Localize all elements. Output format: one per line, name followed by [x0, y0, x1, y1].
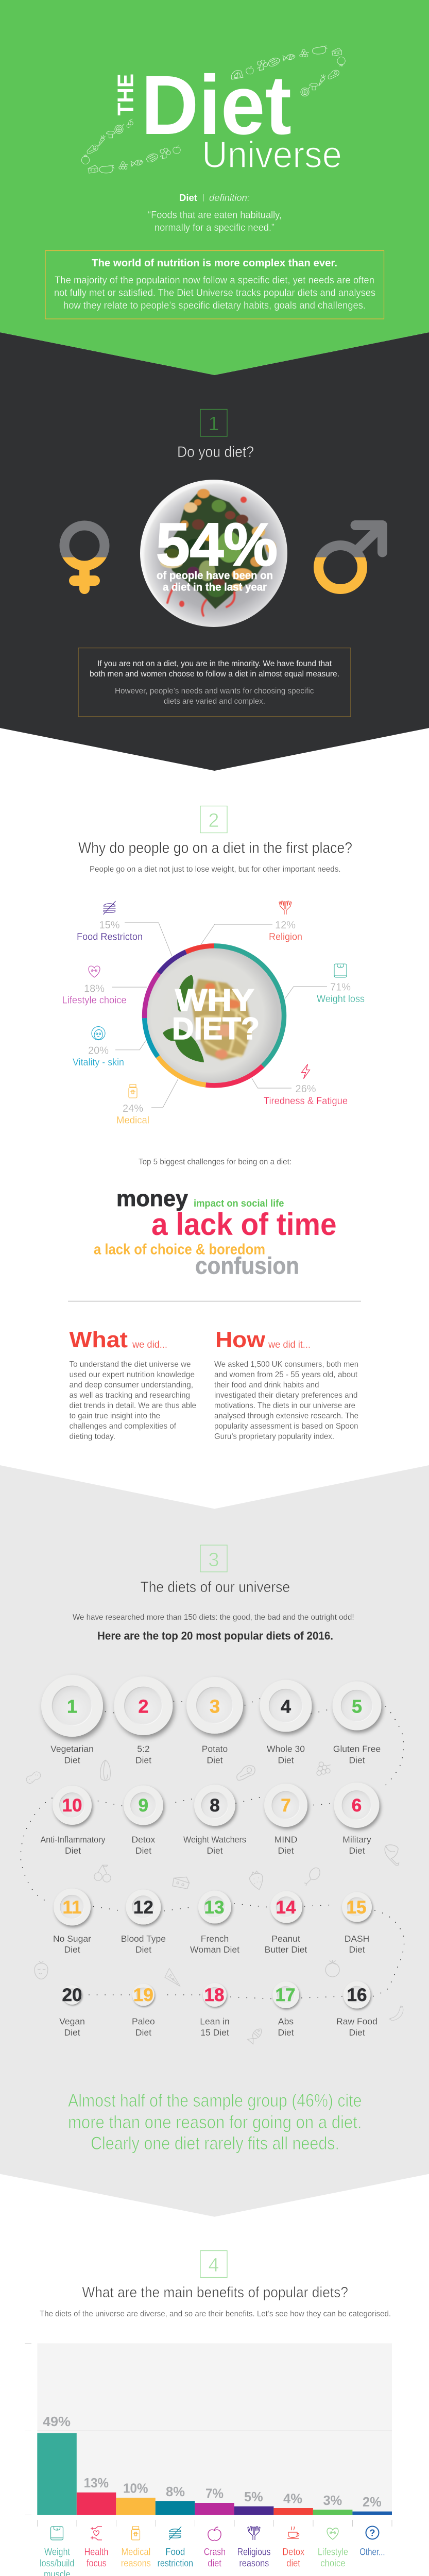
heading: why do people diet: Why do people go on a diet in the first place?	[78, 840, 352, 857]
word cloud: challenges	[94, 1186, 337, 1279]
text block: what we did: and deep consumer understanding,	[69, 1381, 193, 1389]
list item: 1 Vegetarian Diet: Diet	[64, 1755, 80, 1765]
callout: weight loss 71%: 71%	[330, 981, 351, 993]
list item: 3 Potato Diet: Potato	[202, 1743, 228, 1754]
list item: 16 Raw Food Diet	[336, 1981, 377, 2038]
word cloud: challenges: money	[116, 1186, 188, 1211]
text block: how we did it: analysed through extensive research. The	[214, 1412, 358, 1420]
list item: 5 Gluten Free Diet	[333, 1682, 381, 1765]
bar values: 8%	[166, 2484, 185, 2499]
text: top 20 heading: Here are the top 20 most popular diets of 2016.	[97, 1630, 333, 1642]
text block: how we did it: investigated their dietary preferences and	[214, 1391, 357, 1400]
text: researched intro: We have researched more than 150 diets: the good, the bad and the outright odd!	[73, 1613, 354, 1622]
list item: 9 Detox Diet: 9	[139, 1795, 148, 1816]
list item: 17 Abs Diet: 17	[276, 1985, 295, 2005]
callout: medical 24%: 24%	[123, 1103, 143, 1114]
category: medical reasons: reasons	[121, 2558, 151, 2569]
text block: how we did it: Guru’s proprietary popularity index.	[214, 1432, 334, 1441]
list item: 16 Raw Food Diet: Diet	[349, 2027, 365, 2038]
list item: 1 Vegetarian Diet: Vegetarian	[50, 1743, 94, 1754]
list item: 6 Military Diet	[334, 1783, 379, 1856]
list item: 11 No Sugar Diet	[53, 1889, 91, 1955]
list item: 7 MIND Diet: Diet	[278, 1845, 294, 1856]
icons: food orbit around the title	[81, 46, 345, 173]
text block: how we did it: How	[215, 1327, 266, 1352]
text: subheading: People go on a diet not just to lose weight, but for other important needs.	[90, 865, 341, 874]
list item: 17 Abs Diet: Diet	[278, 2027, 294, 2038]
word cloud: challenges: impact on social life	[194, 1198, 284, 1209]
chart: pasta plate donut	[145, 946, 284, 1086]
list item: 16 Raw Food Diet: 16	[347, 1985, 367, 2005]
section number 3: 3	[208, 1549, 219, 1571]
list item: 6 Military Diet: Diet	[349, 1845, 365, 1856]
title	[113, 58, 342, 176]
callout: food restriction 15%: Food Restricton	[77, 931, 143, 943]
image: salad plate	[140, 480, 287, 627]
list item: 17 Abs Diet	[272, 1981, 299, 2038]
list item: 1 Vegetarian Diet	[41, 1675, 103, 1765]
list item: 2 5:2 Diet: 2	[138, 1696, 148, 1717]
callout: world of nutrition: The world of nutrition is more complex than ever.	[92, 258, 337, 269]
heading: do you diet: Do you diet?	[177, 444, 254, 461]
callout: world of nutrition: The majority of the population now follow a specific diet, yet needs are often	[55, 275, 374, 286]
icons: background food outlines	[26, 1758, 403, 2044]
callout: food restriction 15%	[77, 901, 172, 956]
chart: benefits bar chart	[25, 2343, 392, 2527]
section number 4: 4	[208, 2255, 219, 2276]
list item: 5 Gluten Free Diet: Gluten Free	[333, 1743, 381, 1754]
category: detox diet: Detox	[282, 2547, 305, 2558]
text block: what we did: used our expert nutrition knowledge	[69, 1370, 195, 1379]
list item: 12 Blood Type Diet: 12	[133, 1897, 153, 1918]
list item: 3 Potato Diet: Diet	[207, 1755, 223, 1765]
list item: 12 Blood Type Diet	[121, 1890, 166, 1955]
section number 3	[200, 1545, 227, 1572]
callout: minority: However, people’s needs and wants for choosing specific	[115, 687, 314, 696]
text block: how we did it	[214, 1327, 358, 1441]
list item: 19 Paleo Diet: 19	[133, 1985, 153, 2005]
category: crash diet	[204, 2527, 226, 2569]
category: food restriction: restriction	[158, 2558, 193, 2569]
list item: 8 Weight Watchers Diet: Diet	[207, 1845, 223, 1856]
bar values: 2%	[363, 2494, 382, 2510]
text block: what we did: as well as tracking and researching	[69, 1391, 190, 1400]
list item: 9 Detox Diet	[124, 1786, 163, 1856]
list item: 15 DASH Diet: 15	[347, 1897, 366, 1918]
icon: male symbol	[318, 526, 382, 589]
category: crash diet: Crash	[204, 2547, 226, 2558]
text: definition: Diet	[179, 193, 197, 203]
list item: 18 Lean in 15 Diet: 15 Diet	[200, 2027, 229, 2038]
text block: what we did: challenges and complexities of	[69, 1422, 177, 1431]
category: food restriction: Food	[166, 2547, 185, 2558]
list item: 3 Potato Diet: 3	[210, 1696, 220, 1717]
list item: 7 MIND Diet: 7	[281, 1795, 291, 1816]
list item: 8 Weight Watchers Diet: Weight Watchers	[183, 1834, 246, 1844]
callout: almost half of sample: Clearly one diet rarely fits all needs.	[91, 2133, 339, 2154]
callout: world of nutrition: how they relate to people’s specific dietary habits, goals and challenges.	[63, 300, 366, 311]
chart: pasta plate donut: WHY	[175, 983, 254, 1018]
list item: 9 Detox Diet: Detox	[132, 1834, 156, 1844]
callout: vitality skin 20%: 20%	[88, 1045, 109, 1056]
callout: world of nutrition: not fully met or satisfied. The Diet Universe tracks popular diets and analyses	[54, 287, 375, 299]
list item: 19 Paleo Diet: Diet	[135, 2027, 151, 2038]
callout: world of nutrition	[45, 250, 384, 319]
stat: 54 percent: 54%	[156, 511, 278, 578]
stat: 54 percent: of people have been on	[157, 570, 273, 582]
category: health focus: focus	[87, 2558, 107, 2569]
text: top 5 challenges intro: Top 5 biggest challenges for being on a diet:	[139, 1158, 291, 1166]
list item: 11 No Sugar Diet: 11	[63, 1897, 81, 1918]
list item: 20 Vegan Diet: Vegan	[59, 2016, 85, 2027]
list item: 13 French Woman Diet: Woman Diet	[190, 1944, 239, 1955]
list item: 2 5:2 Diet: Diet	[135, 1755, 151, 1765]
list item: 13 French Woman Diet: French	[201, 1934, 229, 1944]
list item: 4 Whole 30 Diet	[260, 1680, 312, 1765]
text block: what we did: What	[69, 1327, 128, 1352]
category: health focus: Health	[84, 2547, 108, 2558]
list item: 10 Anti-Inflammatory Diet	[40, 1786, 106, 1856]
callout: medical 24%: Medical	[116, 1115, 149, 1126]
list item: 8 Weight Watchers Diet: 8	[210, 1795, 220, 1816]
callout: tiredness and fatigue 26%	[252, 1064, 348, 1107]
category: medical reasons: Medical	[121, 2547, 150, 2558]
list item: 4 Whole 30 Diet: Whole 30	[267, 1743, 305, 1754]
list item: 2 5:2 Diet: 5:2	[137, 1743, 150, 1754]
section number 2	[200, 806, 227, 833]
list item: 4 Whole 30 Diet: 4	[281, 1696, 291, 1717]
list item: 20 Vegan Diet	[59, 1985, 85, 2038]
bar values: 4%	[283, 2491, 302, 2506]
category: weight loss / build muscle: loss/build	[40, 2558, 74, 2569]
list item: 6 Military Diet: 6	[352, 1795, 362, 1816]
text block: what we did	[69, 1327, 196, 1441]
heading: main benefits: What are the main benefits of popular diets?	[82, 2284, 348, 2301]
list item: 10 Anti-Inflammatory Diet: 10	[62, 1795, 82, 1816]
callout: vitality skin 20%: Vitality - skin	[73, 1057, 124, 1068]
list item: 10 Anti-Inflammatory Diet: Anti-Inflammatory	[40, 1834, 106, 1844]
panel: header background	[0, 0, 429, 375]
callout: minority: both men and women choose to follow a diet in almost equal measure.	[90, 670, 339, 679]
category: detox diet	[282, 2527, 305, 2569]
category: weight loss / build muscle	[40, 2527, 74, 2576]
text block: what we did: dieting today.	[69, 1432, 115, 1441]
callout: lifestyle choice 18%: Lifestyle choice	[62, 995, 127, 1006]
list item: 18 Lean in 15 Diet: 18	[204, 1985, 224, 2005]
list item: 11 No Sugar Diet: No Sugar	[53, 1934, 91, 1944]
list item: 6 Military Diet: Military	[342, 1834, 371, 1844]
category: lifestyle choice: choice	[320, 2558, 346, 2569]
list item: 17 Abs Diet: Abs	[278, 2016, 294, 2027]
category: detox diet: diet	[286, 2558, 301, 2569]
word cloud: challenges: a lack of choice & boredom	[94, 1242, 265, 1258]
list item: 3 Potato Diet	[186, 1677, 243, 1765]
bar values: 7%	[205, 2486, 224, 2501]
list item: 18 Lean in 15 Diet	[200, 1983, 230, 2038]
section number 2: 2	[208, 810, 219, 832]
callout: tiredness and fatigue 26%: 26%	[295, 1083, 316, 1095]
text block: what we did: To understand the diet universe we	[69, 1360, 191, 1369]
callout: minority: diets are varied and complex.	[164, 697, 265, 706]
category: religious reasons: Religious	[237, 2547, 271, 2558]
bars	[37, 2433, 392, 2515]
list item: 8 Weight Watchers Diet	[183, 1785, 246, 1856]
callout: medical 24%	[116, 1079, 178, 1126]
title: THE	[113, 74, 138, 115]
list item: 5 Gluten Free Diet: 5	[352, 1696, 362, 1717]
text: definition: definition:	[209, 193, 250, 203]
list item: 7 MIND Diet	[264, 1784, 307, 1856]
text block: how we did it: motivations. The diets in our universe are	[214, 1401, 355, 1410]
callout: religion 12%: Religion	[269, 931, 302, 943]
category: health focus	[84, 2527, 108, 2569]
list item: 7 MIND Diet: MIND	[274, 1834, 297, 1844]
section number 4	[200, 2250, 227, 2277]
list item: 15 DASH Diet: Diet	[349, 1944, 365, 1955]
list item: 19 Paleo Diet: Paleo	[132, 2016, 155, 2027]
callout: vitality skin 20%	[73, 1027, 146, 1068]
list item: 14 Peanut Butter Diet: 14	[276, 1897, 296, 1918]
text: definition: normally for a specific need.”	[155, 223, 274, 233]
bar values: 5%	[244, 2489, 263, 2504]
category: food restriction	[158, 2527, 193, 2569]
heading: diets of our universe: The diets of our universe	[141, 1579, 290, 1596]
section number 1: 1	[208, 413, 219, 435]
category: crash diet: diet	[208, 2558, 222, 2569]
list item: 14 Peanut Butter Diet: Butter Diet	[265, 1944, 307, 1955]
category: lifestyle choice	[318, 2528, 348, 2569]
list item: 12 Blood Type Diet: Diet	[135, 1944, 151, 1955]
list item: 10 Anti-Inflammatory Diet: Diet	[65, 1845, 81, 1856]
list item: 16 Raw Food Diet: Raw Food	[336, 2016, 377, 2027]
list item: 11 No Sugar Diet: Diet	[64, 1944, 80, 1955]
category: medical reasons	[121, 2527, 151, 2569]
category: other: Other...	[359, 2547, 385, 2558]
callout: almost half of sample: more than one reason for going on a diet.	[68, 2112, 362, 2132]
text block: how we did it: and women from 25 - 55 years old, about	[214, 1370, 358, 1379]
list item: 9 Detox Diet: Diet	[135, 1845, 151, 1856]
text block: how we did it: popularity assessment is based on Spoon	[214, 1422, 358, 1431]
title: Diet	[141, 58, 291, 152]
bar values: 3%	[323, 2493, 342, 2508]
list item: 15 DASH Diet	[342, 1892, 372, 1955]
panel: diets section background	[0, 1465, 429, 2217]
category: religious reasons	[237, 2527, 271, 2569]
callout: lifestyle choice 18%	[62, 966, 147, 1006]
list item: 2 5:2 Diet	[114, 1676, 173, 1765]
list item: 1 Vegetarian Diet: 1	[67, 1696, 77, 1717]
list item: 14 Peanut Butter Diet: Peanut	[271, 1934, 300, 1944]
callout: religion 12%	[201, 901, 302, 944]
text: definition	[148, 193, 282, 233]
text: benefits intro: The diets of the universe are diverse, and so are their benefits. Let’s see how they can be categorised.	[40, 2310, 391, 2318]
text block: what we did: diet trends in detail. We are thus able	[69, 1401, 196, 1410]
text block: how we did it: we did it...	[268, 1340, 311, 1350]
list item: 13 French Woman Diet	[190, 1891, 239, 1955]
callout: tiredness and fatigue 26%: Tiredness & Fatigue	[264, 1096, 348, 1107]
category: lifestyle choice: Lifestyle	[318, 2547, 348, 2558]
list item: 13 French Woman Diet: 13	[204, 1897, 224, 1918]
callout: minority: If you are not on a diet, you are in the minority. We have found that	[97, 659, 332, 668]
category: other	[359, 2527, 385, 2558]
category: religious reasons: reasons	[239, 2558, 269, 2569]
text block: what we did: to gain true insight into the	[69, 1412, 160, 1420]
category: weight loss / build muscle: Weight	[44, 2547, 71, 2558]
list item: 5 Gluten Free Diet: Diet	[349, 1755, 365, 1765]
list item: 14 Peanut Butter Diet	[265, 1891, 307, 1955]
list item: 20 Vegan Diet: 20	[62, 1985, 82, 2005]
callout: minority	[78, 648, 351, 717]
panel: do you diet background	[0, 332, 429, 771]
list item: 15 DASH Diet: DASH	[345, 1934, 369, 1944]
path: dotted connector	[21, 1699, 404, 1999]
list item: 12 Blood Type Diet: Blood Type	[121, 1934, 166, 1944]
list item: 19 Paleo Diet	[132, 1984, 155, 2038]
word cloud: challenges: confusion	[195, 1252, 299, 1279]
bar values: 13%	[84, 2475, 109, 2490]
section number 1	[200, 409, 227, 436]
text: definition: “Foods that are eaten habitually,	[148, 210, 282, 221]
category: other: ?	[370, 2528, 375, 2538]
word cloud: challenges: a lack of time	[151, 1207, 337, 1242]
bar values: 10%	[123, 2481, 148, 2496]
bar values	[43, 2414, 382, 2510]
list item: 4 Whole 30 Diet: Diet	[278, 1755, 294, 1765]
callout: weight loss 71%: Weight loss	[317, 994, 365, 1005]
stat: 54 percent: a diet in the last year	[163, 581, 267, 593]
callout: almost half of sample	[68, 2091, 362, 2154]
callout: food restriction 15%: 15%	[99, 920, 120, 931]
text block: how we did it: their food and drink habits and	[214, 1381, 319, 1389]
callout: almost half of sample: Almost half of the sample group (46%) cite	[68, 2091, 362, 2111]
list item: 18 Lean in 15 Diet: Lean in	[200, 2016, 230, 2027]
bar values: 49%	[43, 2414, 71, 2429]
list item: 20 Vegan Diet: Diet	[64, 2027, 80, 2038]
icon: female symbol	[64, 526, 105, 594]
text block: what we did: we did...	[132, 1340, 167, 1350]
text block: how we did it: We asked 1,500 UK consumers, both men	[214, 1360, 358, 1369]
chart: pasta plate donut: DIET?	[172, 1011, 260, 1046]
callout: religion 12%: 12%	[275, 920, 296, 931]
callout: weight loss 71%	[285, 964, 365, 1005]
title: Universe	[202, 134, 342, 176]
callout: lifestyle choice 18%: 18%	[84, 983, 105, 994]
